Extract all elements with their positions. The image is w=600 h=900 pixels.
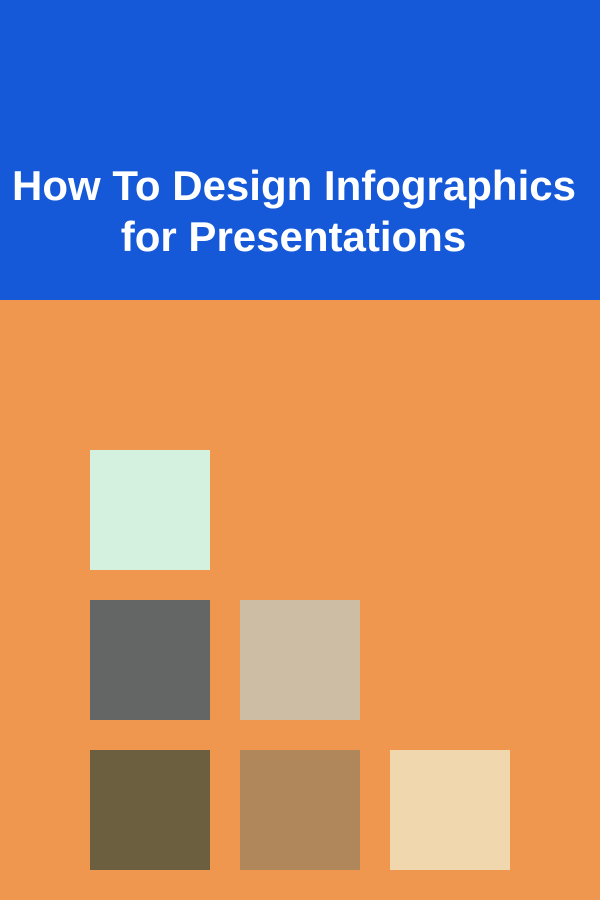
square: beige <box>240 600 360 720</box>
title <box>12 162 576 260</box>
square: cream <box>390 750 510 870</box>
square: tan <box>240 750 360 870</box>
square: olive brown <box>90 750 210 870</box>
header panel <box>0 0 600 300</box>
title: How To Design Infographics <box>12 162 576 209</box>
square: dark gray <box>90 600 210 720</box>
square: mint <box>90 450 210 570</box>
title: for Presentations <box>121 213 466 260</box>
panel: square grid <box>90 450 510 870</box>
